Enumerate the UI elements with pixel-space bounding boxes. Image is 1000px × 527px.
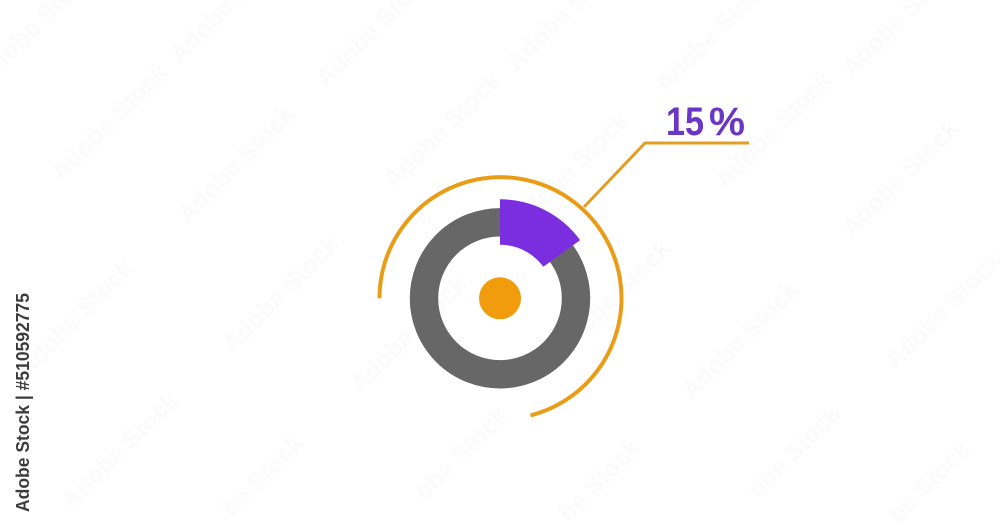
watermark pattern: Adobe Stock <box>56 386 184 514</box>
watermark pattern: Adobe Stock <box>172 100 300 228</box>
watermark pattern: Adobe Stock <box>836 114 964 242</box>
watermark pattern: Adobe Stock <box>676 276 804 404</box>
watermark pattern: Adobe Stock <box>344 270 472 398</box>
watermark pattern: be Stock <box>216 429 309 523</box>
watermark pattern: obe Stock <box>409 401 513 506</box>
center dot <box>479 277 521 319</box>
watermark pattern: Adobe Stock <box>45 58 173 186</box>
outer orange arc <box>379 177 621 415</box>
percentage label: 15 <box>666 100 704 144</box>
watermark pattern: be Stock <box>883 435 976 527</box>
watermark pattern: Adobe Stock <box>378 66 506 194</box>
watermark pattern: Adobe Stock <box>709 66 837 194</box>
watermark pattern: Adobe Stock <box>548 234 676 362</box>
percentage label: % <box>709 100 745 144</box>
donut ring <box>424 222 576 374</box>
watermark pattern: Adobe Stock <box>506 106 634 234</box>
leader line <box>584 143 749 207</box>
watermark pattern: be Stock <box>553 433 646 527</box>
watermark pattern: obe Stock <box>742 399 846 504</box>
watermark pattern: Adobe Stock <box>11 254 139 382</box>
watermark pattern: Adobe Stock <box>216 230 344 358</box>
highlighted 15% segment <box>500 199 580 267</box>
stock id caption: Adobe Stock | #510592775 <box>13 293 33 512</box>
percentage label <box>666 100 745 144</box>
